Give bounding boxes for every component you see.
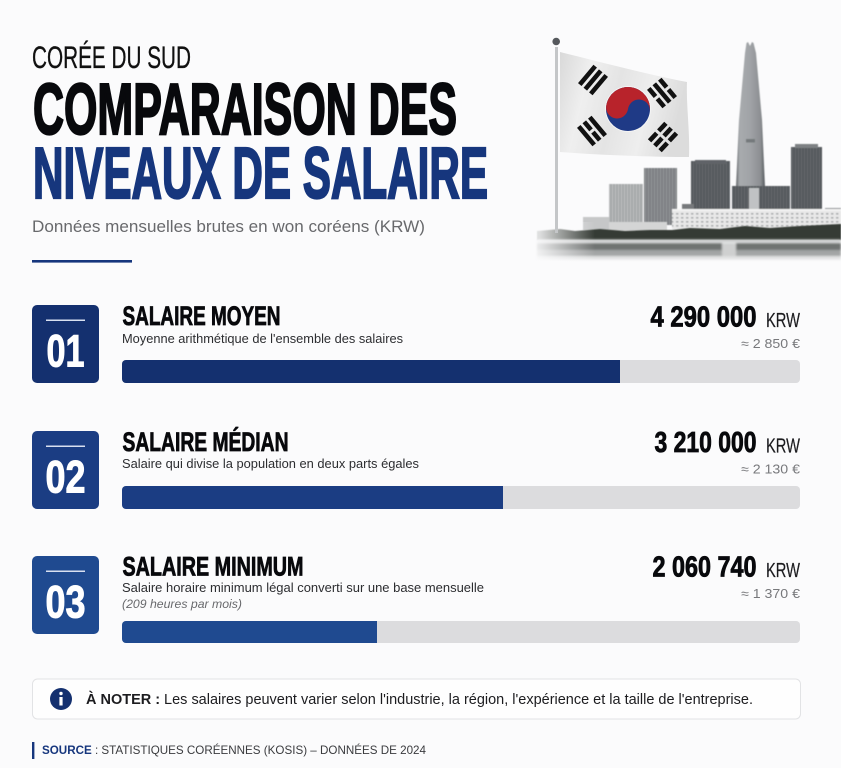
bar (122, 621, 800, 643)
icon: Lotte tower (736, 42, 765, 187)
icon: trigram bottom left (577, 116, 607, 146)
eyebrow: country: CORÉE DU SUD (32, 39, 191, 75)
description: Moyenne arithmétique de l'ensemble des salaires (122, 331, 403, 346)
panel: salaire median (32, 426, 801, 509)
number badge 02: 02 (46, 452, 86, 502)
description: Salaire horaire minimum légal converti sur une base mensuelle (122, 580, 484, 595)
heading block (32, 39, 488, 263)
euro value: ≈ 2 850 € (741, 336, 801, 351)
title line 2: NIVEAUX DE SALAIRE (33, 134, 488, 214)
label: SALAIRE MOYEN (122, 301, 280, 331)
icon: trigram top right (647, 78, 677, 108)
icon: trees and riverbank (537, 224, 841, 260)
panel: salaire minimum (32, 552, 801, 643)
heading underline (32, 260, 132, 263)
label: SALAIRE MÉDIAN (122, 426, 288, 457)
value: 4 290 000 (650, 302, 756, 334)
label: SALAIRE MINIMUM (122, 552, 304, 582)
subtitle: Données mensuelles brutes en won coréens (KRW) (32, 217, 425, 236)
icon: flag pole (552, 38, 560, 233)
euro value: ≈ 1 370 € (741, 586, 801, 601)
value: KRW (766, 434, 800, 458)
icon: info (50, 688, 72, 710)
number badge 02 (32, 431, 99, 509)
icon: taegeuk (602, 83, 654, 135)
description note: (209 heures par mois) (122, 597, 242, 611)
icon: trigram top left (578, 65, 608, 95)
source: SOURCE : STATISTIQUES CORÉENNES (KOSIS) – DONNÉES DE 2024 (42, 742, 426, 757)
number badge 03 (32, 556, 99, 634)
bar (122, 360, 800, 383)
image: flag and Seoul skyline (510, 38, 841, 266)
value: KRW (766, 309, 800, 332)
number badge 01 (32, 305, 99, 383)
value: 3 210 000 (654, 427, 756, 459)
panel: salaire moyen (32, 301, 801, 383)
value: 2 060 740 (652, 552, 756, 584)
icon: skyline (583, 42, 841, 231)
note text: À NOTER : Les salaires peuvent varier selon l'industrie, la région, l'expérience et la taille de l'entreprise. (86, 691, 753, 708)
number badge 03: 03 (46, 576, 86, 628)
description: Salaire qui divise la population en deux parts égales (122, 456, 419, 471)
euro value: ≈ 2 130 € (741, 462, 801, 476)
icon: South Korean flag (560, 52, 689, 157)
number badge 01: 01 (46, 326, 84, 376)
callout: note (32, 679, 800, 719)
bar (122, 486, 800, 509)
icon: trigram bottom right (648, 122, 678, 152)
title line 1: COMPARAISON DES (33, 70, 457, 150)
value: KRW (766, 559, 800, 582)
